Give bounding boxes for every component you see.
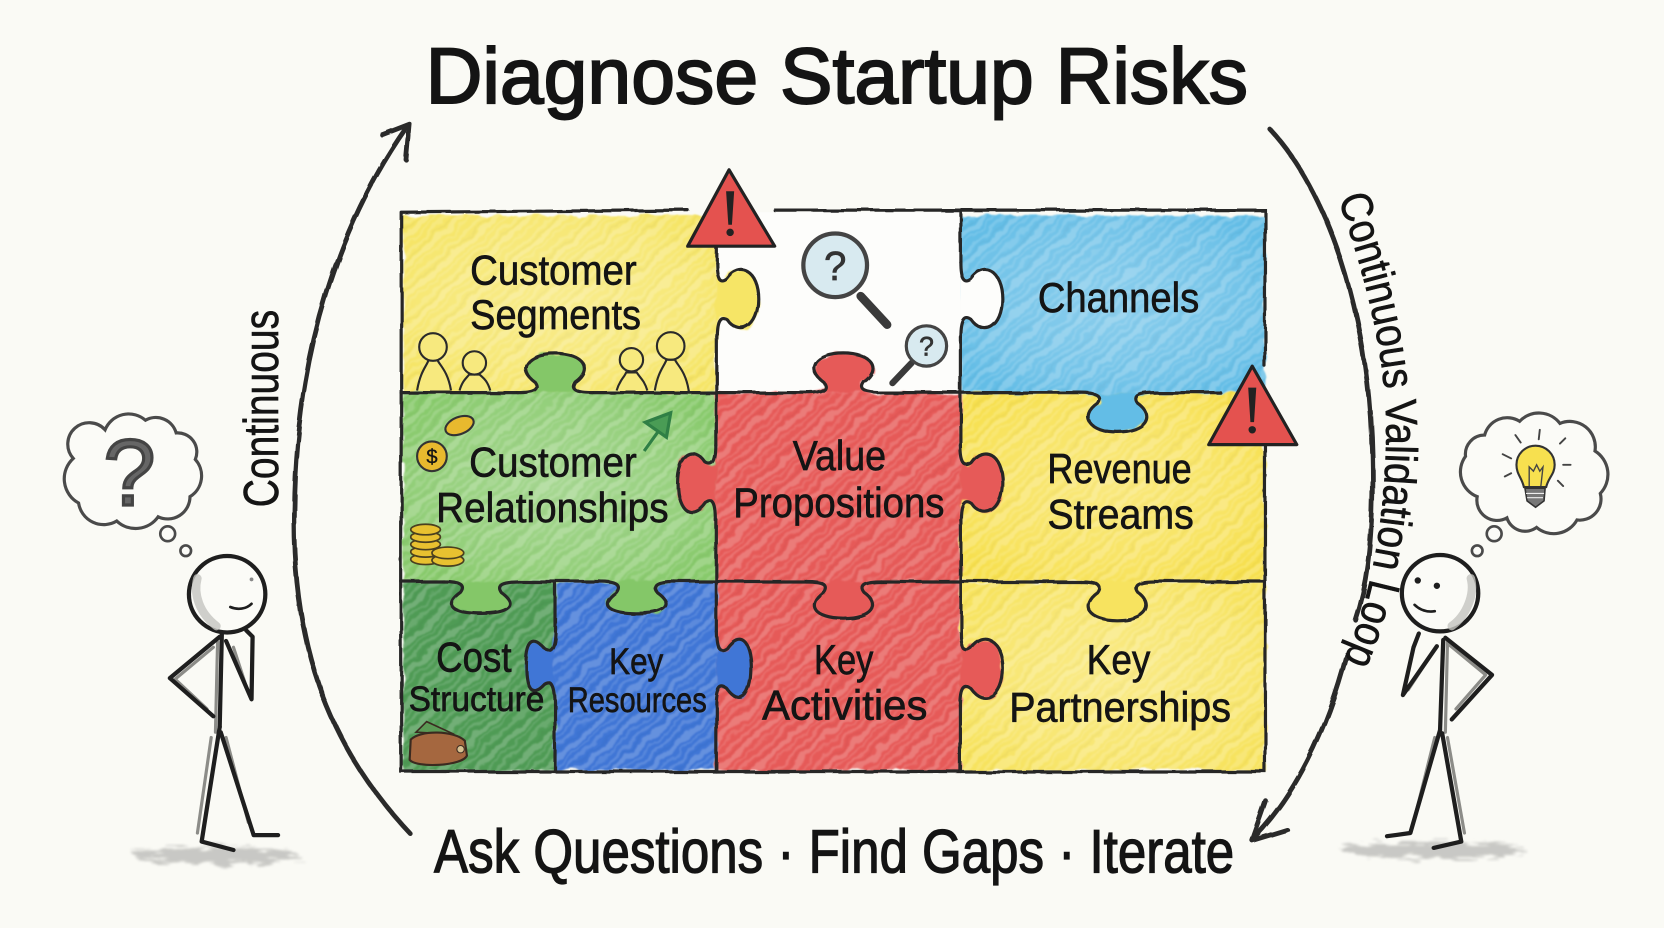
panel: key partnerships [960, 583, 1265, 770]
text: continuous validation loop: Continuous Validation Loop [1340, 194, 1418, 666]
panel: customer segments [403, 215, 759, 393]
panel: key activities [716, 582, 1003, 770]
arrow: left loop arc [294, 124, 412, 835]
panel: customer segments: Customer [470, 247, 637, 293]
panel: key resources: Resources [568, 681, 707, 720]
panel: customer relationships: Relationships [436, 485, 669, 531]
panel: customer relationships: Customer [469, 439, 637, 485]
icon: coin stack [411, 524, 464, 566]
panel: key activities: Activities [762, 682, 928, 728]
panel: revenue streams [960, 393, 1265, 621]
icon: warning triangle top [688, 170, 775, 246]
icon: warning triangle right [1209, 366, 1297, 445]
stick figure body [170, 556, 278, 850]
panel: value propositions: Value [793, 433, 886, 479]
panel: customer segments: Segments [470, 292, 641, 338]
icon: small magnifier [892, 326, 947, 383]
panel: revenue streams: Revenue [1047, 446, 1192, 492]
panel: channels: Channels [1038, 275, 1199, 321]
panel: key partnerships: Partnerships [1009, 685, 1231, 731]
icon: wallet [410, 722, 467, 765]
panel: channels [960, 215, 1265, 432]
panel: cost structure: Cost [436, 635, 512, 681]
arrow: right loop arc [1252, 129, 1372, 840]
panel: cost structure [403, 582, 555, 770]
icon: light bulb [1503, 430, 1571, 507]
panel: value propositions: Propositions [733, 480, 944, 526]
text: bottom tagline: Ask Questions · Find Gaps · Iterate [434, 817, 1234, 886]
thought cloud with light bulb [1460, 413, 1608, 556]
figure: right person with idea [1340, 413, 1608, 858]
panel: key resources [526, 582, 751, 770]
panel: value propositions [677, 353, 1003, 619]
panel: key partnerships: Key [1087, 637, 1151, 683]
ground shadow right [1340, 842, 1527, 858]
panel: revenue streams: Streams [1047, 491, 1194, 537]
icon: customers group [417, 332, 689, 391]
panel: empty missing piece [716, 212, 1003, 393]
icon: large magnifier: ? [824, 243, 846, 289]
panel: customer relationships [403, 353, 716, 613]
icon: gold coins [417, 412, 476, 471]
figure: left person thinking [64, 414, 299, 864]
thought cloud with question mark [64, 414, 202, 556]
icon: gold coins: $ [426, 447, 438, 469]
ground shadow left [134, 847, 299, 864]
thought cloud with question mark: ? [104, 420, 155, 525]
panel: cost structure: Structure [409, 680, 544, 719]
icon: growth arrow [644, 413, 671, 451]
panel: key activities: Key [814, 637, 874, 683]
icon: large magnifier [803, 233, 887, 325]
title: Diagnose Startup Risks [426, 32, 1248, 120]
puzzle outline [401, 210, 1265, 771]
panel: key resources: Key [609, 640, 664, 682]
icon: small magnifier: ? [919, 331, 934, 361]
stick figure body [1387, 555, 1492, 848]
text: continuous left: Continuous [235, 310, 289, 507]
